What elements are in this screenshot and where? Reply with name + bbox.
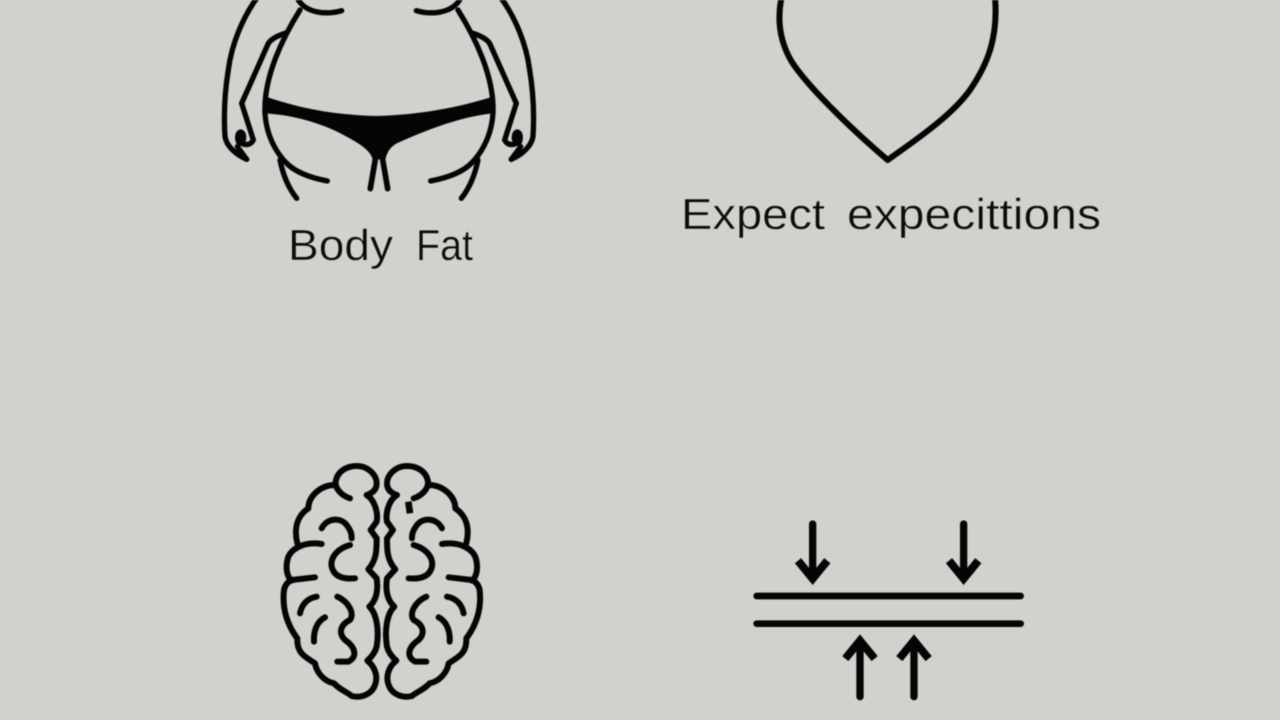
icon: body torso with underwear (224, 0, 534, 198)
label: Expect expecittions: expecittions (847, 190, 1101, 239)
label: Body Fat: Fat (416, 221, 473, 270)
icon: brain (284, 466, 480, 697)
icon: heart (779, 0, 996, 160)
label: Body Fat: Body (288, 221, 393, 270)
icon: compression arrows between two lines (757, 524, 1021, 697)
label: Expect expecittions: Expect (681, 190, 825, 239)
